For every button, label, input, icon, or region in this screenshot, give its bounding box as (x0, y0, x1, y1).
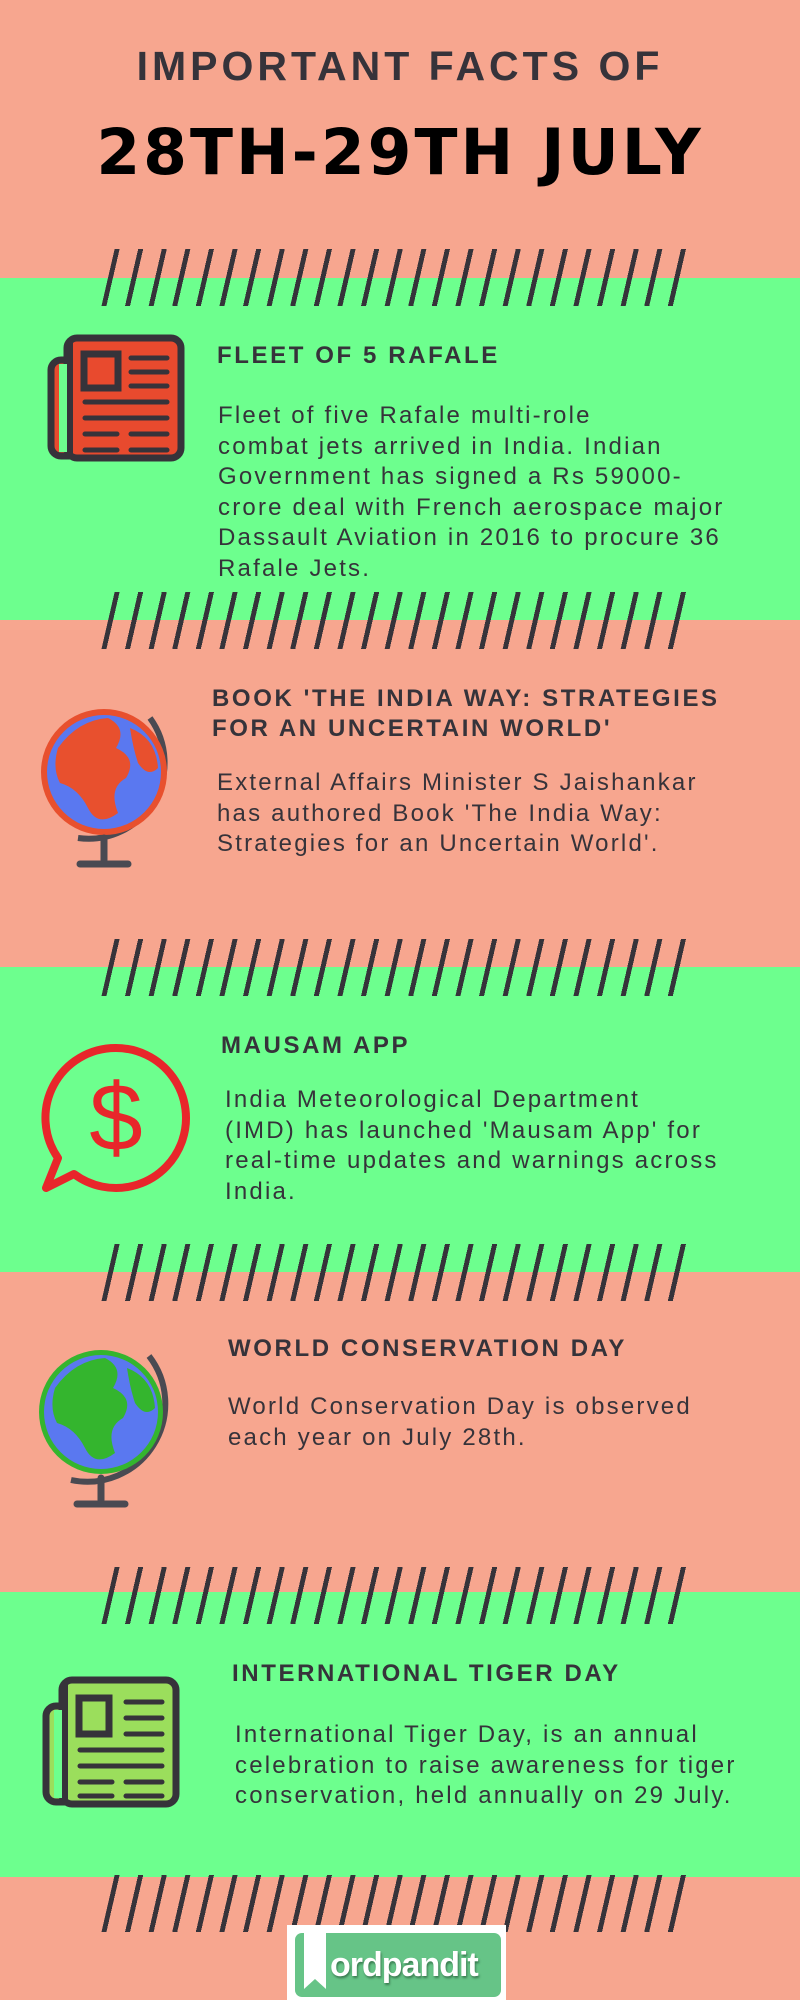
icon: dollar speech bubble: $ (89, 1064, 143, 1171)
text: Rafale Jets. (218, 554, 371, 582)
text: Dassault Aviation in 2016 to procure 36 (218, 524, 721, 551)
text: has authored Book 'The India Way: (217, 800, 663, 826)
icon: newspaper red (48, 334, 184, 462)
subtitle line: IMPORTANT FACTS OF (137, 43, 663, 89)
text: External Affairs Minister S Jaishankar (217, 769, 698, 796)
heading (212, 685, 720, 742)
panel: tiger day (42, 1660, 737, 1809)
panel: mausam (41, 1032, 719, 1204)
logo: wordpandit: ordpandit (330, 1946, 478, 1984)
text: conservation, held annually on 29 July. (235, 1782, 733, 1809)
heading: WORLD CONSERVATION DAY (228, 1335, 627, 1362)
text: combat jets arrived in India. Indian (218, 432, 663, 460)
text: each year on July 28th. (228, 1424, 527, 1450)
panel: rafale (48, 334, 724, 582)
icon: globe orange (41, 709, 168, 868)
text (218, 402, 724, 582)
heading: INTERNATIONAL TIGER DAY (232, 1660, 621, 1687)
text: (IMD) has launched 'Mausam App' for (225, 1116, 702, 1144)
text: India Meteorological Department (225, 1086, 640, 1113)
text: crore deal with French aerospace major (218, 494, 724, 520)
text: India. (225, 1178, 297, 1204)
heading: BOOK 'THE INDIA WAY: STRATEGIES (212, 685, 720, 712)
text: Fleet of five Rafale multi-role (218, 402, 592, 429)
icon: dollar speech bubble (41, 1044, 190, 1192)
panel: conservation day (39, 1335, 692, 1508)
text: Strategies for an Uncertain World'. (217, 830, 660, 857)
logo: wordpandit (287, 1925, 506, 2000)
text (225, 1086, 719, 1204)
icon: newspaper green (42, 1676, 180, 1808)
icon: globe green (39, 1350, 168, 1508)
date heading: 28TH-29TH JULY (96, 116, 704, 189)
heading: FLEET OF 5 RAFALE (217, 342, 500, 369)
text: real-time updates and warnings across (225, 1147, 719, 1174)
text: Government has signed a Rs 59000- (218, 463, 683, 490)
text (217, 769, 698, 857)
text: World Conservation Day is observed (228, 1393, 692, 1420)
panel: book (41, 685, 720, 868)
heading: MAUSAM APP (221, 1032, 410, 1059)
text (235, 1721, 737, 1809)
heading: FOR AN UNCERTAIN WORLD' (212, 715, 612, 742)
title (96, 43, 704, 189)
text: International Tiger Day, is an annual (235, 1721, 699, 1748)
text: celebration to raise awareness for tiger (235, 1752, 737, 1778)
text (228, 1393, 692, 1450)
